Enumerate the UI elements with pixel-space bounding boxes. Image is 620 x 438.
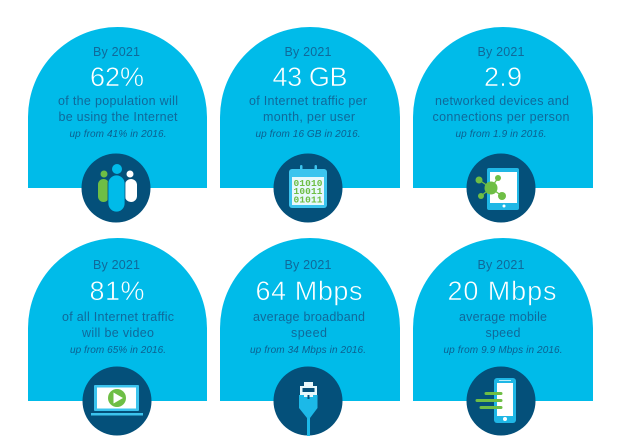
icon: ethernet cable	[274, 366, 342, 436]
stat: 43 GB: 43 GB	[272, 62, 348, 92]
icon: binary calendar	[274, 154, 342, 222]
icon: smartphone speed	[466, 366, 536, 436]
description: broadband: average broadband	[253, 310, 365, 324]
description: mobile: average mobile	[459, 310, 547, 324]
heading: by 2021: By 2021	[93, 258, 140, 272]
heading: by 2021: By 2021	[284, 45, 332, 59]
icon: binary calendar: 10011	[294, 186, 323, 197]
heading: by 2021: By 2021	[93, 45, 140, 59]
description: devices: networked devices and	[435, 94, 569, 108]
description: population: of the population will	[58, 94, 178, 108]
icon: people	[82, 154, 150, 222]
description: per person: connections per person	[432, 110, 570, 124]
description: speed: speed	[291, 326, 327, 340]
description: video: will be video	[81, 326, 154, 340]
icon: laptop video	[82, 366, 152, 436]
heading: by 2021: By 2021	[478, 258, 525, 272]
panel: traffic per user	[220, 27, 400, 222]
description: per user: month, per user	[263, 110, 355, 124]
description: using the internet: be using the Internet	[58, 110, 178, 124]
stat: 64 Mbps: 64 Mbps	[256, 276, 362, 306]
panel: broadband speed	[220, 238, 400, 436]
note: 1.9: up from 1.9 in 2016.	[456, 129, 546, 140]
panel: video	[28, 238, 207, 436]
stat: 62%: 62%	[90, 62, 144, 92]
description: internet traffic: of all Internet traffic	[62, 310, 174, 324]
description: traffic: of Internet traffic per	[249, 94, 367, 108]
note: 41%: up from 41% in 2016.	[70, 129, 166, 140]
icon: tablet network	[466, 154, 536, 222]
panel: population	[28, 27, 207, 222]
stat: 81%: 81%	[90, 276, 144, 306]
stat: 20 Mbps: 20 Mbps	[448, 276, 556, 306]
panel: devices	[413, 27, 593, 222]
note: 65%: up from 65% in 2016.	[70, 345, 166, 356]
heading: by 2021: By 2021	[284, 258, 332, 272]
note: 9.9 Mbps: up from 9.9 Mbps in 2016.	[444, 345, 562, 356]
stat: 2.9: 2.9	[484, 62, 522, 92]
note: 16 GB: up from 16 GB in 2016.	[256, 129, 360, 140]
icon: binary calendar: 01010	[294, 178, 323, 189]
note: 34 Mbps: up from 34 Mbps in 2016.	[250, 345, 366, 356]
panel: mobile speed	[413, 238, 593, 436]
icon: binary calendar: 01011	[294, 194, 323, 206]
description: speed: speed	[486, 326, 521, 340]
heading: by 2021: By 2021	[478, 45, 525, 59]
